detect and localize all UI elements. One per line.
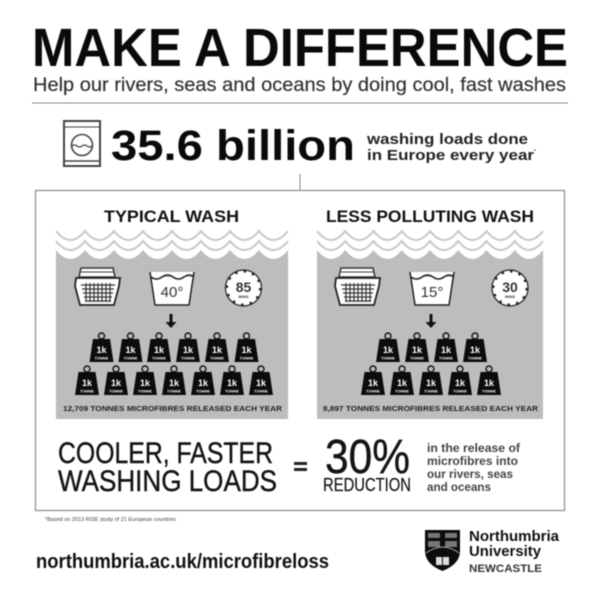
url: northumbria.ac.uk/microfibreloss [36, 550, 329, 573]
arrow [166, 314, 176, 328]
weights: less polluting wash: TONNE [410, 356, 424, 360]
caption: less polluting wash total: 8,897 TONNES MICROFIBRES RELEASED EACH YEAR [323, 404, 539, 413]
weights: less polluting wash: TONNE [482, 388, 496, 394]
equals sign [294, 462, 307, 471]
text: reduction detail: our rivers, seas [427, 467, 513, 481]
wordmark: NEWCASTLE [469, 563, 542, 575]
statistic: 35.6 billion: 35.6 billion [111, 122, 355, 170]
weights: typical wash: TONNE [124, 356, 138, 360]
wordmark [469, 528, 560, 575]
icon: timer 30 minutes: MINS [505, 294, 515, 299]
icon: timer 85 minutes: MINS [238, 294, 249, 299]
icon: crest shield [425, 530, 460, 571]
weights: typical wash: TONNE [167, 388, 181, 394]
panel: less polluting wash [317, 207, 543, 419]
weights: less polluting wash: 1k [470, 345, 481, 355]
weights: less polluting wash: TONNE [395, 388, 409, 394]
heading: typical wash: TYPICAL WASH [104, 207, 239, 226]
icon: wash tub 15 degrees: 15° [421, 284, 443, 301]
weights: typical wash: 1k [140, 378, 151, 388]
weights: less polluting wash: 1k [368, 378, 379, 388]
footnote: *Based on 2013 RISE study of 21 European countries [45, 517, 177, 523]
weights: typical wash [75, 333, 273, 395]
icon: timer 30 minutes [492, 270, 528, 306]
wordmark: Northumbria [469, 528, 560, 545]
water panel [56, 231, 288, 419]
statistic caption: * [534, 149, 536, 155]
statistic caption: washing loads done [366, 132, 528, 148]
weights: typical wash: TONNE [138, 388, 152, 394]
caption: typical wash total: 12,709 TONNES MICROFIBRES RELEASED EACH YEAR [63, 404, 283, 413]
weights: typical wash: 1k [198, 378, 209, 388]
text: reduction detail: in the release of [427, 441, 521, 455]
icon: wash tub 40 degrees [150, 272, 194, 305]
weights: typical wash: 1k [125, 345, 136, 355]
weights: less polluting wash: 1k [426, 378, 437, 388]
weights: less polluting wash: 1k [484, 378, 495, 388]
icon: timer 85 minutes [226, 270, 262, 306]
weights: typical wash: 1k [212, 345, 223, 355]
weights: typical wash: 1k [227, 378, 238, 388]
weights: less polluting wash [361, 333, 501, 395]
icon: laundry basket [335, 268, 380, 305]
text: cooler, faster washing loads: COOLER, FASTER [58, 437, 273, 470]
panel: main frame [36, 190, 564, 510]
text: reduction detail: and oceans [427, 480, 491, 494]
weights: typical wash: 1k [256, 378, 267, 388]
weights: less polluting wash: 1k [397, 378, 408, 388]
logo: Northumbria University [425, 528, 560, 575]
subtitle: Help our rivers, seas and oceans by doing cool, fast washes [33, 75, 566, 96]
weights: less polluting wash: 1k [455, 378, 466, 388]
icon: timer 30 minutes: 30 [502, 279, 518, 295]
text: reduction detail [427, 441, 521, 494]
weights: less polluting wash: TONNE [366, 388, 380, 394]
statistic: 30% reduction: REDUCTION [323, 475, 411, 495]
statistic: 30% reduction: 30% [325, 431, 410, 484]
text: reduction detail: microfibres into [427, 454, 518, 468]
icon: laundry basket [75, 268, 120, 305]
weights: typical wash: 1k [183, 345, 194, 355]
arrow [426, 314, 436, 328]
weights: less polluting wash: TONNE [468, 356, 482, 360]
weights: typical wash: TONNE [254, 388, 268, 394]
weights: typical wash: TONNE [210, 356, 224, 360]
weights: typical wash: 1k [154, 345, 165, 355]
weights: typical wash: 1k [96, 345, 107, 355]
weights: typical wash: 1k [111, 378, 122, 388]
weights: less polluting wash: TONNE [453, 388, 467, 394]
weights: typical wash: TONNE [109, 388, 123, 394]
weights: less polluting wash: TONNE [424, 388, 438, 394]
weights: less polluting wash: 1k [412, 345, 423, 355]
weights: less polluting wash: TONNE [381, 356, 395, 360]
weights: typical wash: TONNE [152, 356, 166, 360]
icon: timer 85 minutes: 85 [236, 279, 251, 295]
icon: wash tub 15 degrees [410, 272, 454, 305]
text: cooler, faster washing loads [58, 437, 277, 498]
statistic caption: in Europe every year [367, 148, 534, 164]
weights: typical wash: 1k [169, 378, 180, 388]
weights: typical wash: TONNE [95, 356, 109, 360]
heading: less polluting wash: LESS POLLUTING WASH [326, 207, 534, 226]
weights: typical wash: TONNE [225, 388, 239, 394]
statistic caption [366, 132, 536, 164]
wordmark: University [469, 543, 542, 560]
weights: typical wash: 1k [82, 378, 93, 388]
title: MAKE A DIFFERENCE [32, 18, 568, 78]
water panel [317, 231, 543, 419]
icon: washing machine [64, 121, 100, 166]
panel: typical wash [56, 207, 288, 419]
weights: typical wash: TONNE [80, 388, 94, 394]
weights: less polluting wash: 1k [441, 345, 452, 355]
text: cooler, faster washing loads: WASHING LOADS [58, 465, 277, 498]
weights: typical wash: TONNE [196, 388, 210, 394]
weights: typical wash: TONNE [181, 356, 195, 360]
weights: less polluting wash: TONNE [439, 356, 453, 360]
weights: typical wash: 1k [241, 345, 252, 355]
weights: typical wash: TONNE [240, 356, 254, 360]
weights: less polluting wash: 1k [383, 345, 394, 355]
icon: wash tub 40 degrees: 40° [161, 284, 183, 301]
